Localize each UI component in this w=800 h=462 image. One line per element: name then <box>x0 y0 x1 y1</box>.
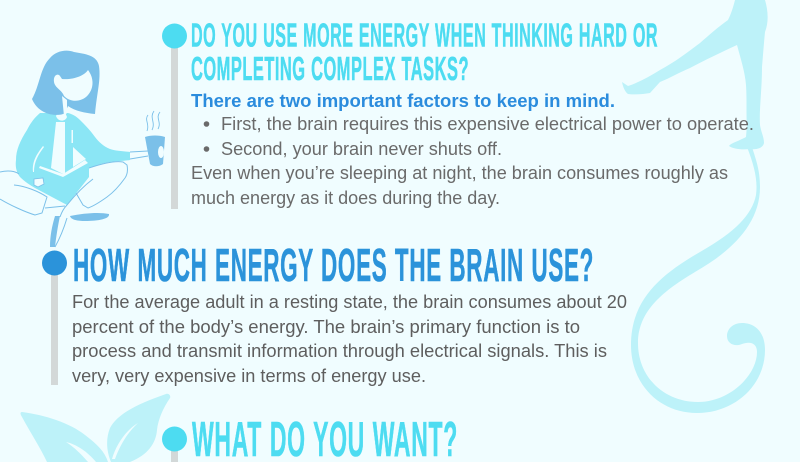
cup <box>145 136 165 166</box>
section 1 body text: much energy as it does during the day. <box>191 188 500 208</box>
steam <box>147 111 160 131</box>
leaves decoration <box>20 394 170 462</box>
face <box>54 70 92 101</box>
section 2 body text <box>72 292 627 386</box>
section 1 bullet list <box>204 114 754 159</box>
section 2 body text: process and transmit information through electrical signals. This is <box>72 341 607 361</box>
section 2 timeline marker <box>42 250 67 385</box>
neck and collar <box>56 112 67 121</box>
section 1 timeline marker <box>162 24 187 209</box>
section 2 body text: percent of the body’s energy. The brain’s primary function is to <box>72 317 580 337</box>
section 1 bullet list: Second, your brain never shuts off. <box>221 139 502 159</box>
section 1 bullet list: First, the brain requires this expensive electrical power to operate. <box>221 114 754 134</box>
shirt gap and jacket details <box>33 130 86 172</box>
silhouette: dancer legs with curling tail <box>622 0 768 413</box>
section 1 heading: COMPLETING COMPLEX TASKS? <box>191 50 469 87</box>
book pages <box>39 160 88 177</box>
section 1 body text <box>191 163 728 208</box>
shoes <box>70 213 109 221</box>
jacket <box>16 113 130 205</box>
illustration: woman reading with a cup <box>0 51 165 247</box>
section 2 body text: For the average adult in a resting state, the brain consumes about 20 <box>72 292 627 312</box>
section 1 body text: Even when you’re sleeping at night, the brain consumes roughly as <box>191 163 728 183</box>
hand on book <box>34 178 44 187</box>
section 2 body text: very, very expensive in terms of energy use. <box>72 366 426 386</box>
section 1 subheading: There are two important factors to keep in mind. <box>191 91 615 111</box>
neck <box>62 96 67 116</box>
section 3 timeline marker <box>162 426 187 462</box>
shirt <box>51 122 65 175</box>
legs and outlines <box>0 151 148 247</box>
hair <box>32 51 100 115</box>
cup handle <box>158 146 164 158</box>
